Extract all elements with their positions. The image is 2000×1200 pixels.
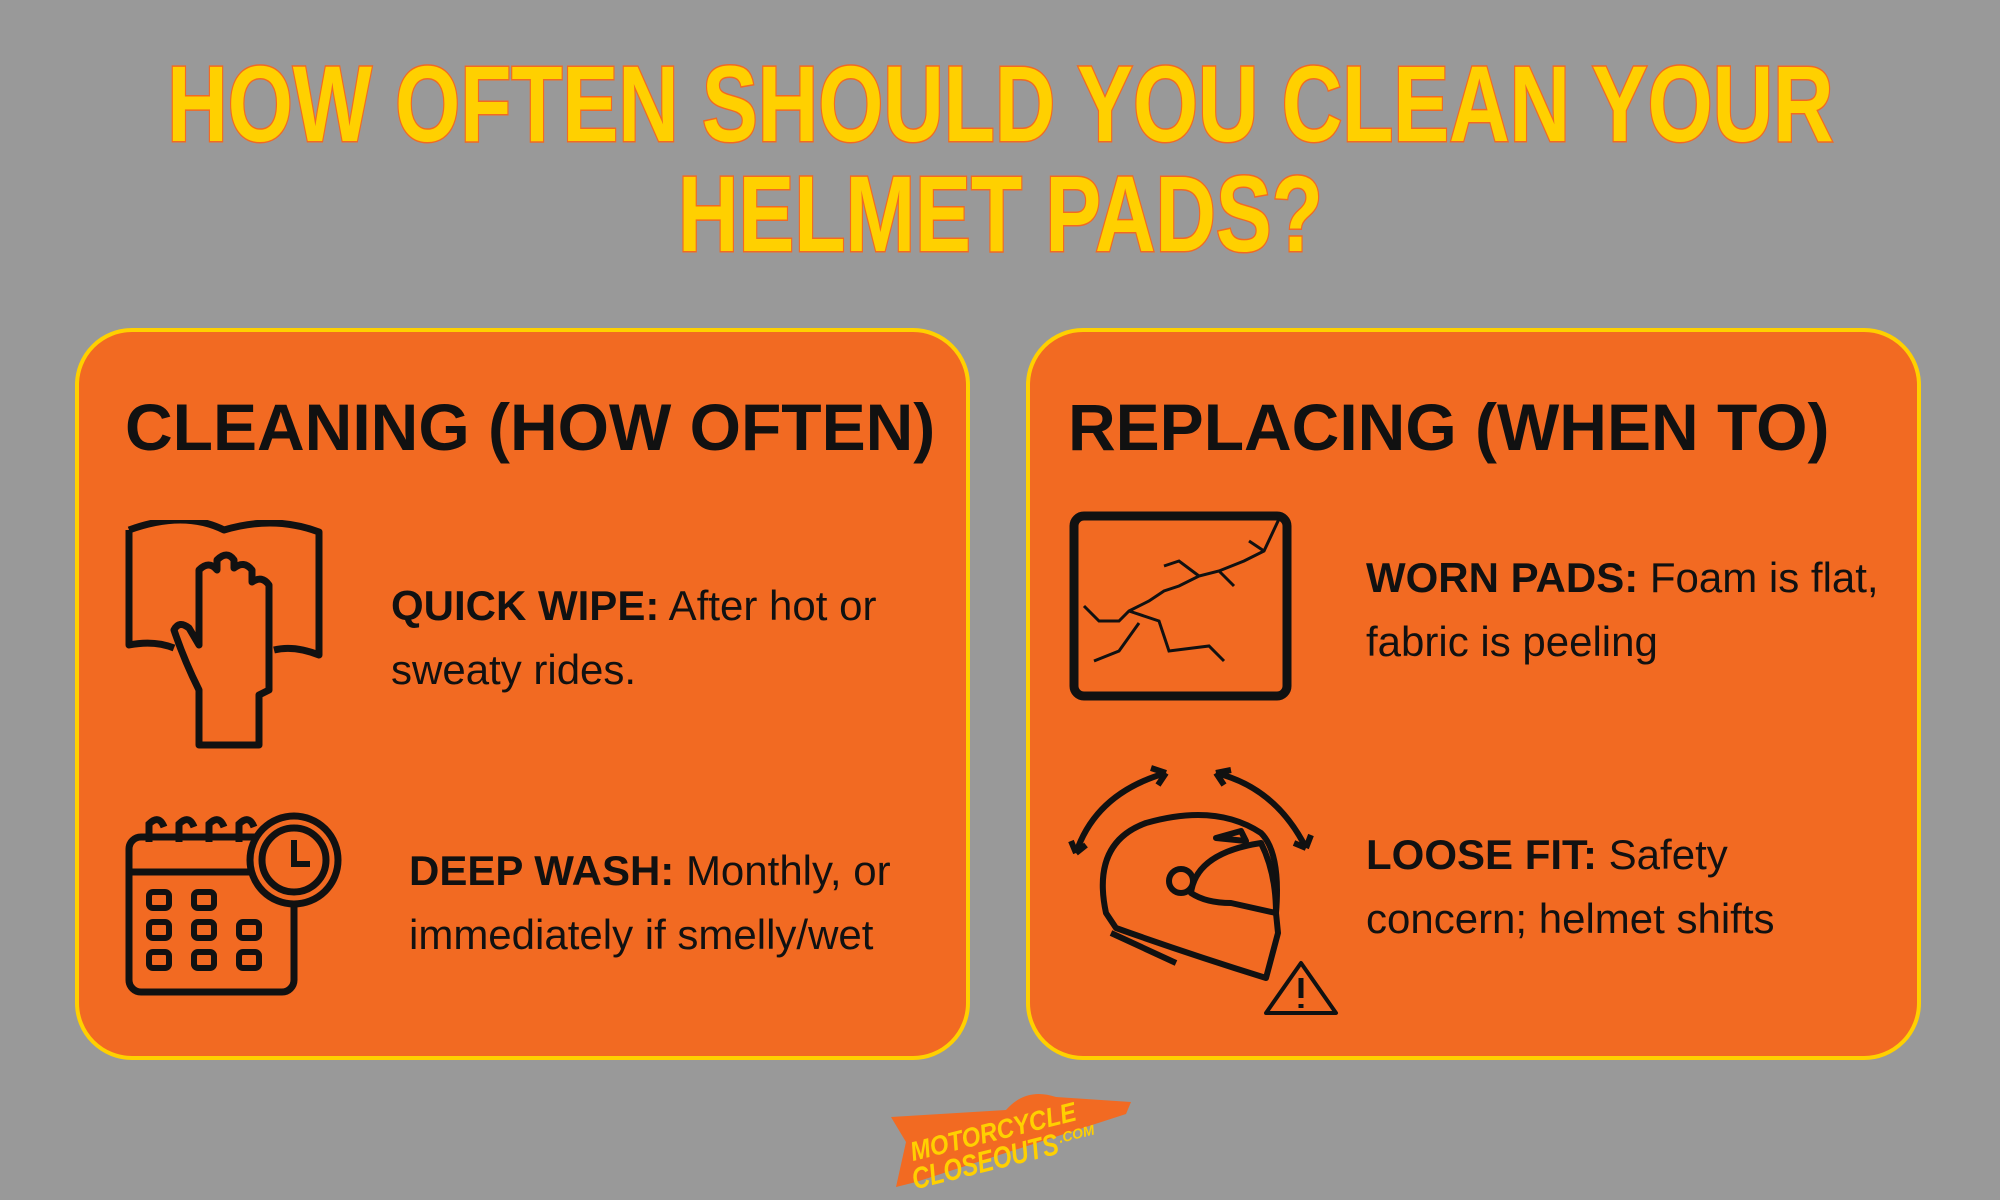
panel: replacing <box>1026 328 1921 1060</box>
text: quick wipe: QUICK WIPE: After hot or <box>391 582 876 629</box>
logo <box>891 1094 1131 1190</box>
text: deep wash: DEEP WASH: Monthly, or <box>409 847 891 894</box>
heading: cleaning: CLEANING (HOW OFTEN) <box>125 390 935 464</box>
logo: MOTORCYCLE <box>907 1096 1080 1167</box>
text: worn pads: fabric is peeling <box>1366 618 1658 665</box>
icon: calendar with clock <box>126 812 342 996</box>
text: quick wipe <box>391 582 876 693</box>
text: loose fit: LOOSE FIT: Safety <box>1366 831 1728 878</box>
title: HOW OFTEN SHOULD YOU CLEAN YOUR <box>167 43 1834 164</box>
text: worn pads <box>1366 554 1879 665</box>
text: loose fit <box>1366 831 1775 942</box>
icon: hand wiping cloth <box>126 520 322 748</box>
panel: cleaning <box>75 328 970 1060</box>
title <box>167 43 1834 274</box>
text: deep wash <box>409 847 891 958</box>
text: deep wash: immediately if smelly/wet <box>409 911 873 958</box>
icon: helmet with arrows and warning <box>1068 765 1338 1015</box>
text: loose fit: concern; helmet shifts <box>1366 895 1775 942</box>
heading: replacing: REPLACING (WHEN TO) <box>1068 390 1829 464</box>
title: HELMET PADS? <box>678 153 1323 274</box>
icon: cracked foam square <box>1070 512 1292 700</box>
logo: .COM <box>1057 1121 1096 1146</box>
text: worn pads: WORN PADS: Foam is flat, <box>1366 554 1879 601</box>
text: quick wipe: sweaty rides. <box>391 646 636 693</box>
